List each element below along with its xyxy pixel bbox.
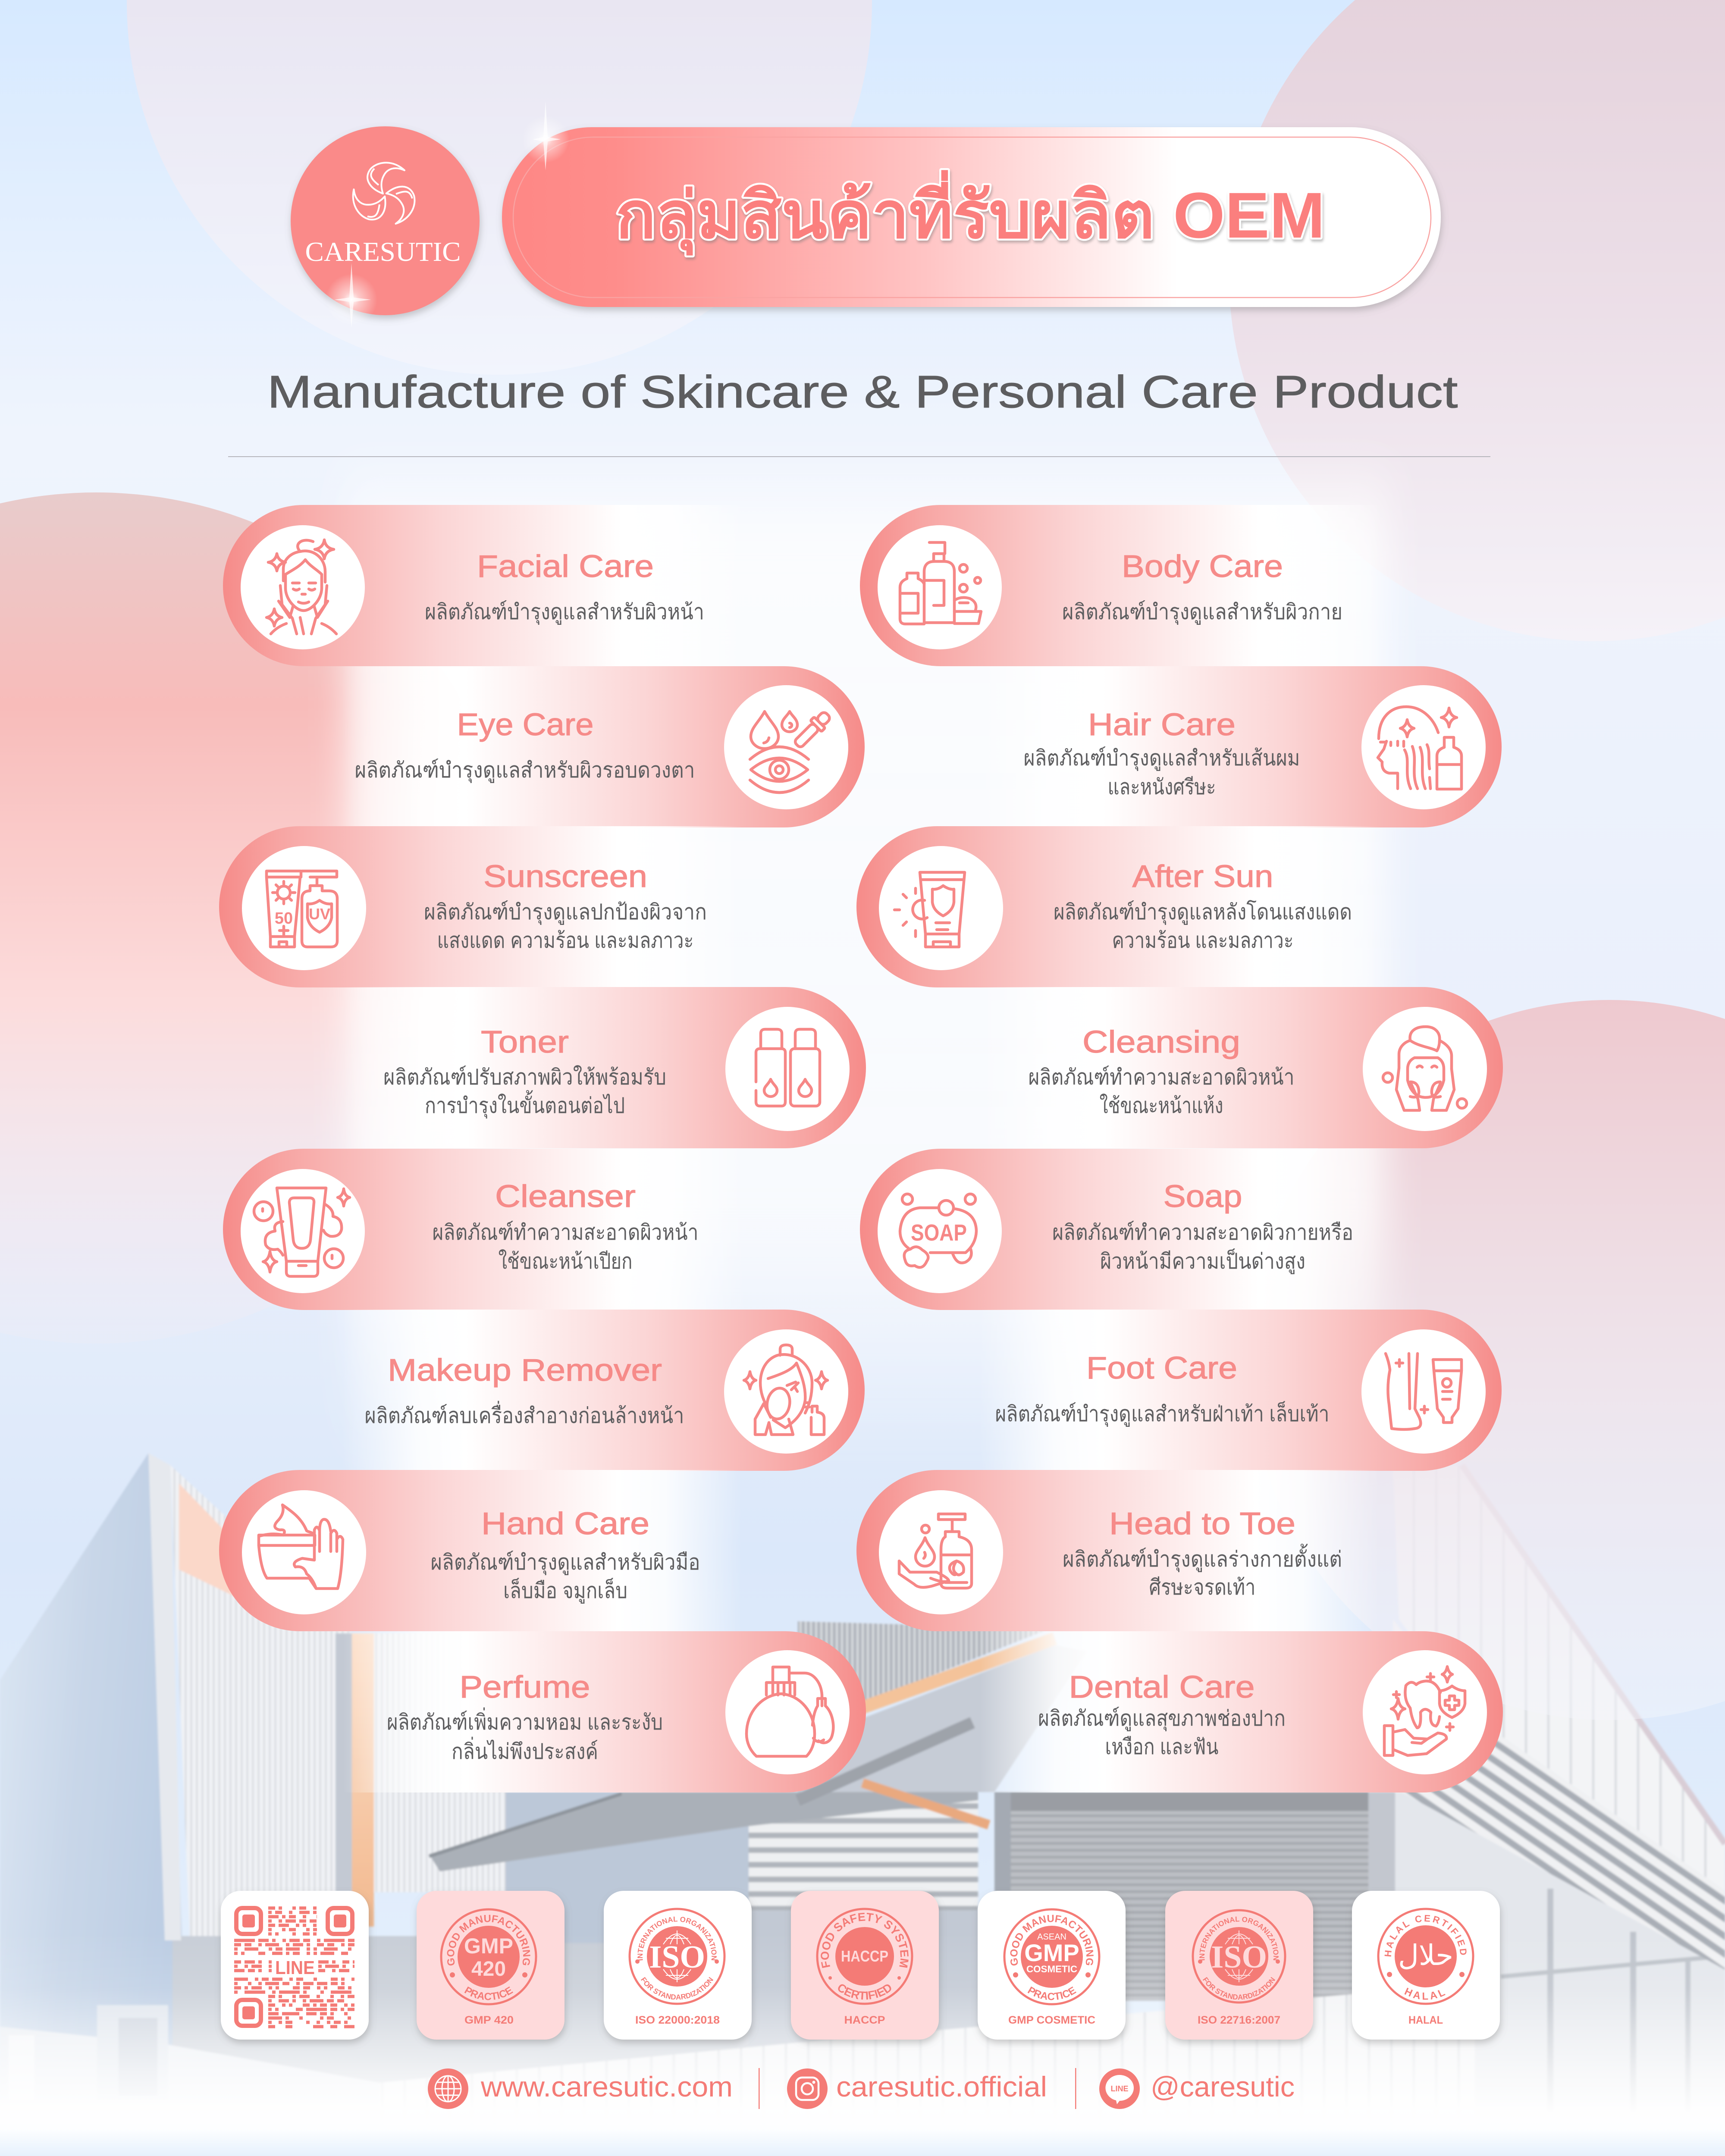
heading: Sunscreen: [483, 859, 647, 894]
description: ผลิตภัณฑ์เพิ่มความหอม และระงับ: [387, 1708, 663, 1734]
certificate: ISO 22716:2007: INTERNATIONAL ORGANIZATION: [1198, 1915, 1280, 1961]
certificate: GMP Cosmetic: [978, 1891, 1126, 2040]
certificate: Halal: HALAL: [1408, 2014, 1443, 2026]
description: [387, 1708, 663, 1764]
icon: soap bar: SOAP: [911, 1220, 967, 1246]
description: ผลิตภัณฑ์บำรุงดูแลสำหรับผิวรอบดวงตา: [354, 758, 695, 783]
icon: face care: [267, 540, 336, 634]
contact: line: [1099, 2068, 1295, 2109]
icon: makeup remover: [744, 1345, 828, 1435]
certificate: HACCP: [791, 1891, 939, 2040]
certificate: ISO 22716:2007: [1165, 1891, 1313, 2040]
certificate: ISO 22000:2018: FOR STANDARDIZATION: [639, 1976, 715, 2001]
contact: website: www.caresutic.com: [480, 2071, 733, 2103]
description: แสงแดด ความร้อน และมลภาวะ: [437, 928, 693, 953]
panel: Foot Care: [898, 1310, 1502, 1471]
heading: Perfume: [460, 1670, 590, 1705]
panel: LINE QR code: [221, 1891, 369, 2040]
description: เล็บมือ จมูกเล็บ: [503, 1578, 627, 1604]
description: ผลิตภัณฑ์บำรุงดูแลสำหรับเส้นผม: [1024, 746, 1300, 771]
certificate: Halal: HALAL CERTIFIED: [1383, 1913, 1469, 1957]
logo wordmark: CARESUTIC: [305, 236, 461, 267]
QR label: LINE: [275, 1957, 315, 1978]
panel: Cleansing: [899, 987, 1503, 1148]
icon: dental care: [1384, 1667, 1465, 1755]
description: [383, 1065, 666, 1119]
certificate: GMP 420: GOOD MANUFACTURING: [445, 1913, 532, 1967]
description: ผลิตภัณฑ์บำรุงดูแลปกป้องผิวจาก: [424, 900, 707, 925]
description: [430, 1550, 700, 1604]
certificate: GMP 420: [417, 1891, 565, 2040]
heading: After Sun: [1132, 859, 1273, 894]
certificate: Halal: HALAL: [1403, 1986, 1449, 2002]
icon: line bubble: LINE: [1110, 2084, 1129, 2093]
description: ผิวหน้ามีความเป็นด่างสูง: [1100, 1248, 1305, 1274]
icon: sunscreen: [267, 871, 337, 947]
panel: Facial Care: [223, 505, 827, 666]
description: ผลิตภัณฑ์บำรุงดูแลหลังโดนแสงแดด: [1054, 900, 1352, 925]
contact: instagram: caresutic.official: [836, 2071, 1047, 2103]
description: ผลิตภัณฑ์ปรับสภาพผิวให้พร้อมรับ: [383, 1065, 666, 1089]
certificate: HACCP: FOOD SAFETY SYSTEM: [819, 1910, 911, 1969]
description: ผลิตภัณฑ์บำรุงดูแลสำหรับผิวหน้า: [425, 600, 704, 625]
description: ศีรษะจรดเท้า: [1149, 1575, 1256, 1599]
certificate: GMP Cosmetic: GOOD MANUFACTURING: [1008, 1913, 1095, 1967]
icon: sunscreen: 50: [275, 909, 293, 928]
certificate: GMP Cosmetic: ASEAN: [1037, 1932, 1066, 1942]
certificate: ISO 22716:2007: FOR STANDARDIZATION: [1201, 1976, 1277, 2001]
icon: hand cream: [259, 1505, 343, 1589]
certificate: HACCP: HACCP: [841, 1947, 888, 1965]
contact: line: @caresutic: [1151, 2071, 1295, 2103]
panel: Perfume: [262, 1631, 866, 1792]
description: ผลิตภัณฑ์บำรุงดูแลสำหรับฝ่าเท้า เล็บเท้า: [995, 1401, 1329, 1427]
certificate: GMP Cosmetic: COSMETIC: [1026, 1964, 1077, 1974]
subtitle: Manufacture of Skincare & Personal Care Product: [267, 367, 1458, 417]
certificate: GMP 420: GMP 420: [464, 2014, 514, 2026]
certificate: ISO 22000:2018: ISO 22000:2018: [635, 2014, 720, 2026]
panel: Head to Toe: [856, 1470, 1460, 1631]
title banner: [502, 127, 1441, 307]
certificate: GMP 420: PRACTICE: [462, 1984, 515, 2002]
panel: Makeup Remover: [261, 1310, 865, 1471]
description: ผลิตภัณฑ์ทำความสะอาดผิวหน้า: [432, 1220, 699, 1244]
heading: Cleansing: [1082, 1025, 1240, 1059]
icon: hair care: [1378, 707, 1462, 789]
heading: Hand Care: [481, 1507, 649, 1541]
panel: Sunscreen: [219, 826, 823, 987]
icon: cleansing face: [1383, 1027, 1467, 1110]
translucent circle over building: [1249, 1000, 1725, 1720]
heading: Facial Care: [477, 549, 654, 584]
logo swirl: [347, 163, 421, 228]
certificate: ISO 22716:2007: ISO 22716:2007: [1198, 2014, 1280, 2026]
heading: Foot Care: [1086, 1351, 1237, 1385]
icon: globe: [428, 2068, 468, 2109]
panel: Eye Care: [261, 666, 865, 827]
contact: website: [428, 2068, 733, 2109]
certificate: GMP Cosmetic: GMP: [1024, 1939, 1079, 1966]
certificate: GMP 420: 420: [471, 1958, 506, 1981]
panel: Hand Care: [219, 1470, 823, 1631]
heading: Eye Care: [457, 708, 593, 742]
description: ใช้ขณะหน้าแห้ง: [1100, 1094, 1223, 1118]
sparkles: [326, 101, 569, 328]
description: [1052, 1220, 1353, 1274]
heading: Soap: [1164, 1179, 1242, 1214]
icon: toner bottles: [756, 1029, 820, 1106]
description: การบำรุงในขั้นตอนต่อไป: [425, 1090, 625, 1119]
icon: line bubble: [1099, 2068, 1140, 2109]
certificate: GMP Cosmetic: PRACTICE: [1026, 1984, 1078, 2002]
description: [424, 900, 707, 953]
heading: Hair Care: [1088, 708, 1236, 742]
heading: Makeup Remover: [388, 1353, 662, 1388]
certificate: ISO 22000:2018: [604, 1891, 752, 2040]
description: ผลิตภัณฑ์ดูแลสุขภาพช่องปาก: [1038, 1706, 1286, 1731]
icon: eye care dropper: [750, 709, 833, 793]
heading: Body Care: [1122, 549, 1283, 584]
title text: กลุ่มสินค้าที่รับผลิต OEM: [616, 170, 1325, 256]
description: ความร้อน และมลภาวะ: [1112, 928, 1294, 953]
icon: soap bar: [900, 1194, 976, 1267]
panel: Hair Care: [898, 666, 1502, 827]
icon: head to toe: [899, 1514, 972, 1588]
panel: Dental Care: [899, 1631, 1503, 1792]
certificate: ISO 22000:2018: ISO: [649, 1940, 705, 1975]
description: [1038, 1706, 1286, 1759]
description: เหงือก และฟัน: [1105, 1735, 1219, 1759]
heading: Cleanser: [495, 1179, 636, 1214]
logo badge: [291, 126, 480, 315]
central white wash: [345, 457, 1389, 1466]
description: ใช้ขณะหน้าเปียก: [499, 1249, 632, 1273]
description: และหนังศรีษะ: [1107, 775, 1216, 799]
description: [432, 1220, 699, 1273]
description: [1054, 900, 1352, 953]
heading: Head to Toe: [1109, 1507, 1295, 1541]
description: [1024, 746, 1300, 799]
description: ผลิตภัณฑ์ทำความสะอาดผิวหน้า: [1028, 1065, 1295, 1089]
description: กลิ่นไม่พึงประสงค์: [452, 1737, 598, 1764]
certificate: GMP 420: GMP: [464, 1934, 513, 1958]
description: ผลิตภัณฑ์บำรุงดูแลร่างกายตั้งแต่: [1063, 1544, 1342, 1572]
description: ผลิตภัณฑ์ลบเครื่องสำอางก่อนล้างหน้า: [365, 1401, 684, 1428]
icon: perfume bottle: [746, 1667, 833, 1756]
certificate: HACCP: CERTIFIED: [835, 1981, 894, 2002]
description: ผลิตภัณฑ์บำรุงดูแลสำหรับผิวมือ: [430, 1550, 700, 1575]
contact: instagram: [787, 2068, 1047, 2109]
heading: Toner: [481, 1025, 569, 1059]
icon: sunscreen: UV: [309, 905, 330, 923]
icon: foot care: [1386, 1354, 1462, 1429]
icon: instagram: [787, 2068, 828, 2109]
description: ผลิตภัณฑ์บำรุงดูแลสำหรับผิวกาย: [1062, 600, 1342, 625]
certificate: GMP Cosmetic: GMP COSMETIC: [1008, 2014, 1095, 2026]
description: [1063, 1544, 1342, 1599]
description: ผลิตภัณฑ์ทำความสะอาดผิวกายหรือ: [1052, 1220, 1353, 1244]
heading: Dental Care: [1069, 1670, 1255, 1705]
certificate: HACCP: HACCP: [844, 2014, 885, 2026]
panel: Cleanser: [223, 1149, 827, 1310]
panel: Toner: [262, 987, 866, 1148]
certificate: Halal: [1352, 1891, 1500, 2040]
panel: Body Care: [860, 505, 1464, 666]
QR finder marks: [236, 1908, 352, 2026]
bottom white fade: [0, 1932, 1725, 2156]
description: [1028, 1065, 1295, 1118]
certificate: Halal: حلال: [1398, 1939, 1453, 1972]
background circles: [0, 0, 1725, 1344]
factory building photo: [0, 1453, 1725, 2156]
certificate: ISO 22000:2018: INTERNATIONAL ORGANIZATION: [636, 1915, 718, 1961]
icon: after sun tube: [894, 872, 965, 947]
certificate: ISO 22716:2007: ISO: [1211, 1940, 1267, 1975]
QR modules: [234, 1908, 354, 2027]
icon: body care bottles: [900, 542, 981, 624]
panel: Soap: [860, 1149, 1464, 1310]
panel: After Sun: [856, 826, 1460, 987]
icon: cleanser tube: [254, 1188, 350, 1276]
